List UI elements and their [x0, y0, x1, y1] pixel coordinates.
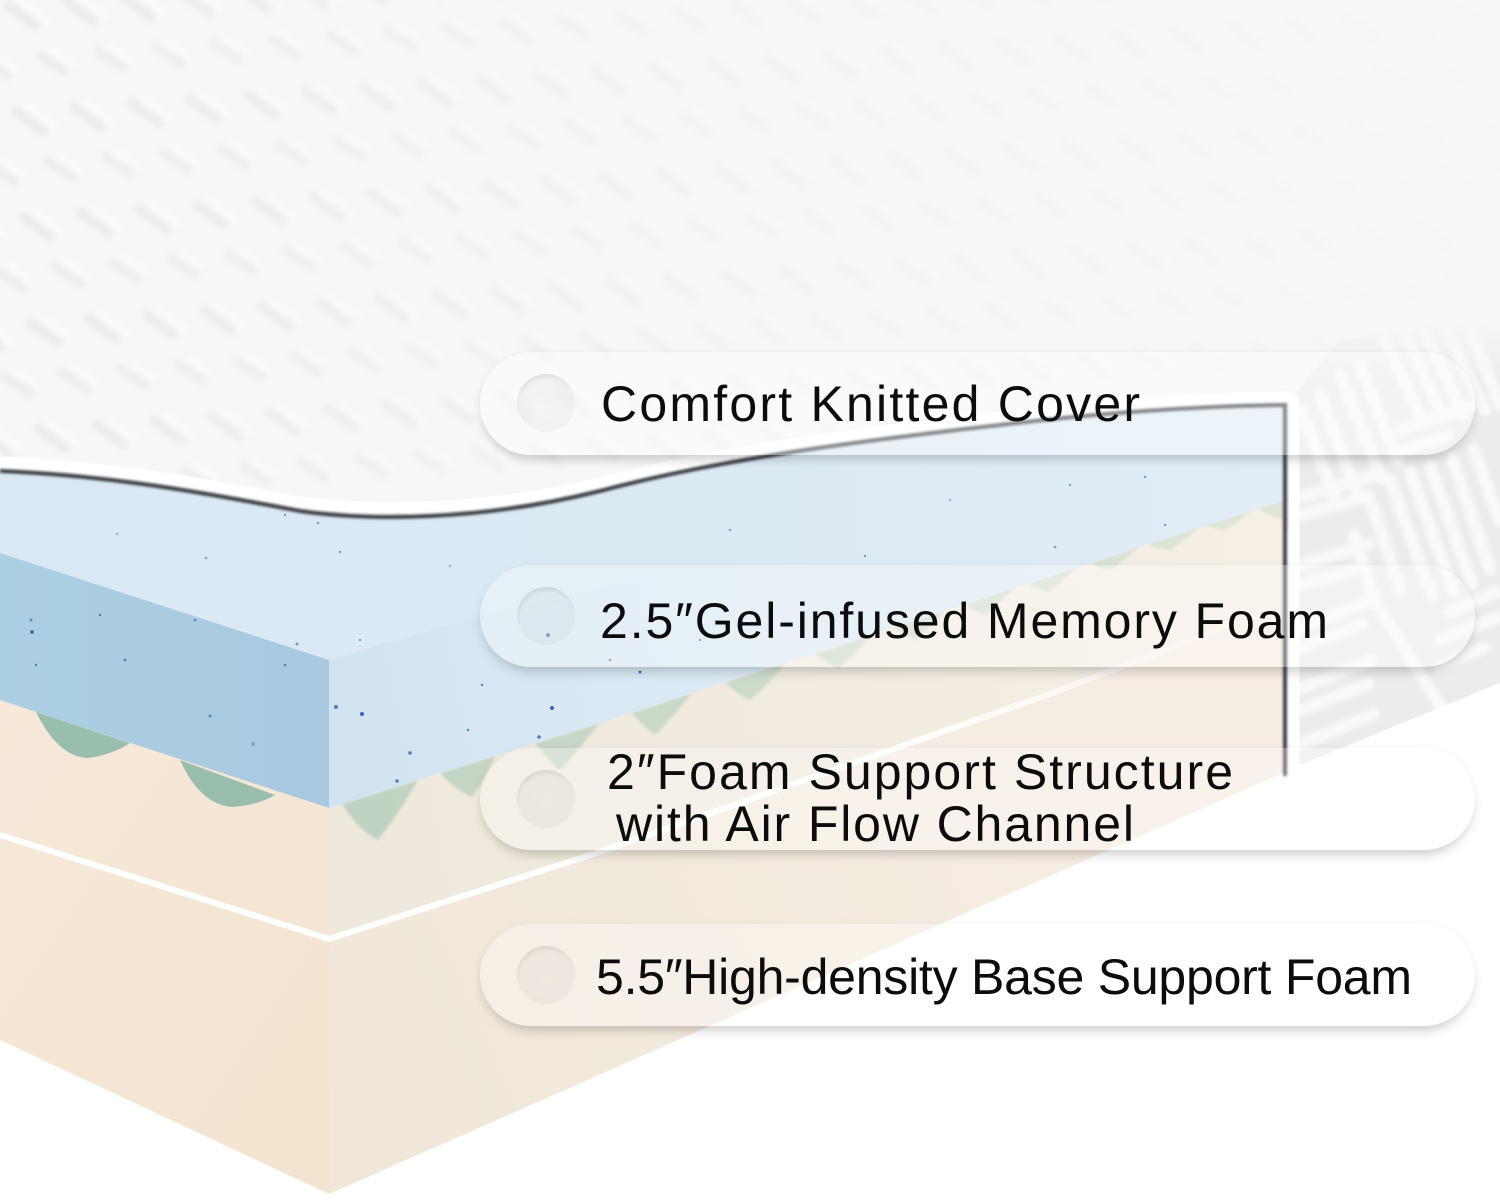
label text: 2.5″Gel-infused Memory Foam	[600, 593, 1328, 649]
cut edge: white cover border and shadow	[0, 397, 1294, 776]
panel: gel memory foam left face	[0, 553, 329, 808]
callout: Gel-infused Memory Foam	[480, 565, 1475, 667]
pill shadows	[482, 357, 1473, 1031]
panel: knitted cover top surface	[0, 0, 1500, 530]
icon: indent circle	[517, 587, 575, 645]
label text, two lines: 2″Foam Support Structure	[607, 744, 1233, 800]
gel speckles	[30, 476, 1166, 783]
panel: cream base foam, right face lower	[329, 604, 1285, 1194]
label text: 5.5″High-density Base Support Foam	[596, 949, 1412, 1005]
air flow channels: right face	[342, 500, 1283, 840]
callout: Comfort Knitted Cover	[480, 352, 1475, 455]
icon: indent circle	[517, 770, 575, 828]
label text: Comfort Knitted Cover	[601, 376, 1140, 432]
air flow channels: left face	[36, 712, 275, 807]
icon: indent circle	[517, 374, 575, 432]
callout: Foam Support Structure	[480, 744, 1475, 852]
panel: gel memory foam front face	[329, 540, 800, 808]
panel: cream support foam, right face upper	[329, 498, 1285, 1194]
panel: gel memory foam top face	[0, 404, 1285, 808]
panel: knitted cover side with woven pattern	[1300, 364, 1500, 765]
divider: white seam between foam layers	[0, 622, 1240, 939]
callout: High-density Base Support Foam	[480, 924, 1475, 1026]
icon: indent circle	[517, 946, 575, 1004]
label text, two lines	[607, 744, 1233, 852]
label text, two lines: with Air Flow Channel	[615, 796, 1134, 852]
panel: cream support foam, left face	[0, 698, 329, 1194]
